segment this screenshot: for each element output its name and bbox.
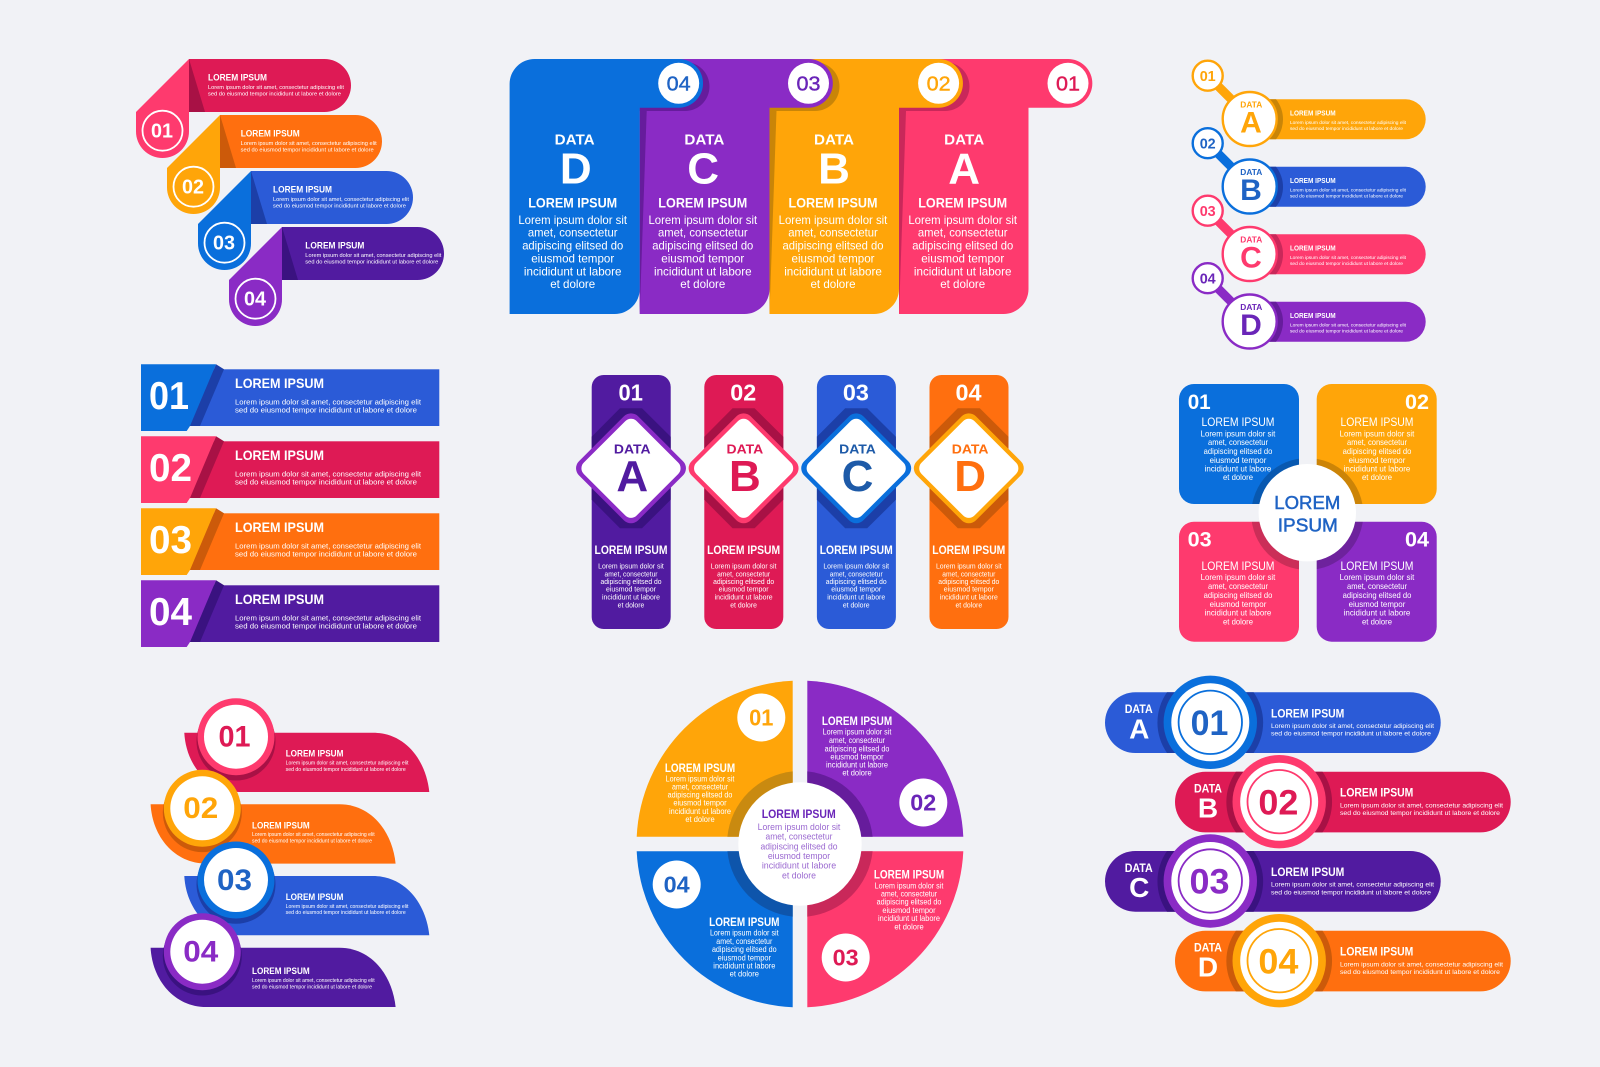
wave 03 (184, 842, 429, 935)
quadrant 03: incididunt ut labore (878, 914, 940, 923)
column 02 data B: et dolore (730, 600, 757, 609)
banner 03 (141, 508, 439, 575)
square 03: Lorem ipsum dolor sit (1201, 572, 1276, 582)
tab: data A: LOREM IPSUM (918, 194, 1007, 210)
wave 04: 04 (183, 936, 219, 968)
ribbon 03: sed do eiusmod tempor incididunt ut labore et dolore (273, 203, 406, 209)
row: 04 data D: 04 (1200, 272, 1216, 288)
column 02 data B: Lorem ipsum dolor sit (711, 562, 776, 571)
tab: data C: et dolore (680, 277, 726, 291)
tab: data B: LOREM IPSUM (788, 194, 878, 210)
wave 01: LOREM IPSUM (286, 749, 343, 760)
pill 01 data A: DATA (1125, 704, 1153, 716)
quadrant 03 (807, 851, 963, 1007)
quadrant 01: LOREM IPSUM (665, 763, 735, 775)
row: 02 data B: 02 (1200, 136, 1216, 152)
quadrant 04: Lorem ipsum dolor sit (710, 929, 779, 938)
pill 01 data A: Lorem ipsum dolor sit amet, consectetur adipiscing elit (1271, 723, 1434, 730)
tab: data D: adipiscing elitsed do (522, 239, 623, 253)
center circle: eiusmod tempor (768, 851, 830, 862)
row: 01 data A: LOREM IPSUM (1290, 108, 1336, 117)
row: 01 data A: A (1240, 106, 1262, 139)
column 03 data C: Lorem ipsum dolor sit (823, 562, 889, 571)
square 04 (1317, 522, 1437, 642)
quadrant 01: amet, consectetur (672, 783, 728, 792)
quadrant 02: incididunt ut labore (826, 760, 888, 769)
tab: data A: eiusmod tempor (921, 252, 1004, 266)
ribbon 04: Lorem ipsum dolor sit amet, consectetur adipiscing elit (305, 253, 442, 259)
quadrant 02: LOREM IPSUM (822, 716, 892, 728)
ribbon 01: Lorem ipsum dolor sit amet, consectetur adipiscing elit (208, 85, 345, 91)
tab: data B: 02 (927, 74, 951, 96)
ribbon 04: 04 (244, 289, 267, 311)
quadrant 03: 03 (833, 944, 859, 970)
column 02 data B (684, 375, 803, 629)
column 03 data C: 03 (843, 380, 869, 406)
tab: data C: C (687, 144, 719, 194)
square 01: eiusmod tempor (1210, 455, 1267, 465)
pill 03 data C: C (1129, 872, 1149, 903)
wave 01 (184, 698, 429, 792)
pill 04 data D (1175, 914, 1511, 1007)
banner 02: Lorem ipsum dolor sit amet, consectetur adipiscing elit (235, 469, 421, 478)
pill 04 data D: sed do eiusmod tempor incididunt ut labore et dolore (1340, 969, 1500, 976)
row: 03 data C (1193, 196, 1426, 281)
quadrant 01: Lorem ipsum dolor sit (666, 775, 735, 784)
tab: data D: 04 (667, 74, 691, 96)
tab: data D: DATA (555, 131, 595, 148)
quadrant 04: adipiscing elitsed do (712, 945, 777, 954)
pill 03 data C: Lorem ipsum dolor sit amet, consectetur adipiscing elit (1271, 882, 1434, 889)
square 03 (1179, 522, 1299, 642)
column 02 data B: amet, consectetur (717, 569, 771, 578)
square 02: LOREM IPSUM (1340, 415, 1414, 429)
banner 02: LOREM IPSUM (235, 447, 324, 463)
tab: data D: LOREM IPSUM (528, 194, 617, 210)
tab: data B: DATA (814, 131, 854, 148)
square 02: incididunt ut labore (1344, 464, 1411, 474)
tab: data A: adipiscing elitsed do (912, 239, 1013, 253)
row: 02 data B: sed do eiusmod tempor incididunt ut labore et dolore (1290, 193, 1403, 198)
row: 01 data A: sed do eiusmod tempor incididunt ut labore et dolore (1290, 126, 1403, 131)
column 03 data C (797, 375, 915, 629)
row: 02 data B: DATA (1240, 167, 1262, 177)
quadrant 03: Lorem ipsum dolor sit (875, 881, 944, 890)
tab: data B: eiusmod tempor (792, 252, 874, 266)
row: 04 data D: sed do eiusmod tempor incididunt ut labore et dolore (1290, 328, 1403, 333)
wave 04: LOREM IPSUM (252, 966, 310, 977)
ribbon 01: sed do eiusmod tempor incididunt ut labore et dolore (208, 91, 341, 97)
pill 03 data C: DATA (1125, 863, 1153, 875)
column 04 data D: adipiscing elitsed do (938, 577, 999, 586)
tab: data A: A (948, 144, 980, 194)
pill 04 data D: 04 (1258, 942, 1299, 981)
column 04 data D: DATA (952, 442, 989, 457)
square 01: Lorem ipsum dolor sit (1201, 428, 1276, 438)
column 02 data B: eiusmod tempor (719, 585, 769, 594)
column 04 data D: LOREM IPSUM (932, 544, 1005, 557)
pill 04 data D: Lorem ipsum dolor sit amet, consectetur adipiscing elit (1340, 961, 1503, 968)
tab: data B: et dolore (810, 277, 856, 291)
square 02: Lorem ipsum dolor sit (1340, 428, 1415, 438)
column 01 data A: eiusmod tempor (606, 585, 656, 594)
panel: circular quadrant chart (637, 681, 963, 1007)
ribbon 03 (198, 171, 413, 270)
column 04 data D (910, 375, 1028, 629)
ribbon 01: LOREM IPSUM (208, 72, 267, 83)
wave 01: Lorem ipsum dolor sit amet, consectetur adipiscing elit (286, 760, 409, 766)
pill 01 data A: 01 (1191, 704, 1228, 743)
row: 04 data D: Lorem ipsum dolor sit amet, consectetur adipiscing elit (1290, 322, 1407, 327)
square 04: LOREM IPSUM (1340, 559, 1414, 573)
ribbon 02: 02 (182, 177, 204, 199)
square 04: et dolore (1362, 616, 1392, 626)
square 02: eiusmod tempor (1349, 455, 1406, 465)
panel: folded ribbons 01-04 (136, 59, 444, 326)
square 04: eiusmod tempor (1349, 599, 1406, 609)
pill 02 data B: LOREM IPSUM (1340, 786, 1413, 800)
center circle: LOREM IPSUM (762, 809, 836, 821)
wave 04: Lorem ipsum dolor sit amet, consectetur adipiscing elit (252, 978, 375, 984)
row: 01 data A: 01 (1200, 69, 1216, 85)
banner 04: LOREM IPSUM (235, 591, 324, 607)
row: 03 data C: LOREM IPSUM (1290, 243, 1336, 252)
tab: data C: adipiscing elitsed do (652, 239, 754, 253)
quadrant 03: LOREM IPSUM (874, 869, 944, 881)
wave 03: sed do eiusmod tempor incididunt ut labore et dolore (286, 910, 406, 916)
tab: data B: adipiscing elitsed do (782, 239, 884, 253)
pill 04 data D: D (1198, 952, 1218, 983)
pill 02 data B: DATA (1194, 784, 1222, 796)
quadrant 03: et dolore (894, 922, 924, 931)
column 01 data A: 01 (619, 380, 643, 406)
tab: data A: amet, consectetur (918, 226, 1008, 240)
row: 03 data C: Lorem ipsum dolor sit amet, consectetur adipiscing elit (1290, 255, 1407, 260)
wave 02 (151, 770, 396, 864)
column 03 data C: LOREM IPSUM (820, 544, 893, 557)
wave 01: 01 (218, 720, 250, 754)
square 02: amet, consectetur (1347, 437, 1407, 447)
tab: data C: LOREM IPSUM (658, 194, 747, 210)
ribbon 02 (167, 115, 382, 214)
panel: interlocking tabs data A-D (510, 59, 1092, 314)
tab: data B: Lorem ipsum dolor sit (779, 213, 888, 227)
panel: pill bars with ringed numbers (1105, 676, 1511, 1007)
row: 01 data A: Lorem ipsum dolor sit amet, consectetur adipiscing elit (1290, 120, 1407, 125)
center circle: Lorem ipsum dolor sit (758, 822, 841, 833)
ribbon 03: LOREM IPSUM (273, 184, 332, 195)
row: 03 data C: sed do eiusmod tempor incididunt ut labore et dolore (1290, 261, 1403, 266)
banner 02: 02 (149, 447, 192, 490)
tab: data C: incididunt ut labore (654, 264, 752, 278)
square 01: 01 (1188, 391, 1211, 414)
wave 02: 02 (183, 792, 218, 825)
column 02 data B: 02 (730, 380, 756, 406)
pill 02 data B: B (1198, 793, 1218, 824)
row: 02 data B: Lorem ipsum dolor sit amet, consectetur adipiscing elit (1290, 187, 1407, 192)
wave 02: sed do eiusmod tempor incididunt ut labore et dolore (252, 838, 372, 844)
banner 03: sed do eiusmod tempor incididunt ut labore et dolore (235, 550, 417, 559)
pill 01 data A (1105, 676, 1441, 769)
square 01: et dolore (1223, 472, 1253, 482)
pill 02 data B (1175, 755, 1511, 848)
row: 02 data B: B (1240, 174, 1262, 207)
column 04 data D: Lorem ipsum dolor sit (936, 562, 1002, 571)
banner 03: LOREM IPSUM (235, 519, 324, 535)
quadrant 01: et dolore (685, 815, 715, 824)
square 04: amet, consectetur (1347, 581, 1407, 591)
banner 01: Lorem ipsum dolor sit amet, consectetur adipiscing elit (235, 397, 421, 406)
square 02 (1317, 384, 1437, 504)
square 04: adipiscing elitsed do (1343, 590, 1412, 600)
row: 04 data D: D (1240, 309, 1262, 342)
row: 03 data C: DATA (1240, 234, 1262, 244)
quadrant 02: 02 (910, 790, 936, 816)
square 03: incididunt ut labore (1205, 608, 1272, 618)
quadrant 02: eiusmod tempor (830, 752, 884, 761)
quadrant 04 (637, 851, 793, 1007)
column 01 data A: A (616, 452, 648, 501)
center circle (738, 782, 862, 906)
banner 01: LOREM IPSUM (235, 375, 324, 391)
center circle: amet, consectetur (766, 832, 832, 843)
column 01 data A: DATA (614, 442, 651, 457)
column 03 data C: incididunt ut labore (827, 592, 885, 601)
row: 03 data C: C (1240, 241, 1262, 274)
column 01 data A (572, 375, 690, 629)
quadrant 01: adipiscing elitsed do (668, 791, 733, 800)
quadrant 01: 01 (749, 704, 774, 730)
pill 04 data D: DATA (1194, 943, 1222, 955)
center circle (1251, 458, 1363, 570)
quadrant 01: eiusmod tempor (673, 799, 727, 808)
column 04 data D: 04 (956, 380, 982, 406)
tab: data B (770, 59, 963, 314)
ribbon 04 (229, 227, 444, 326)
tab: data D: amet, consectetur (528, 226, 618, 240)
square 04: Lorem ipsum dolor sit (1340, 572, 1415, 582)
column 01 data A: Lorem ipsum dolor sit (598, 562, 664, 571)
tab: data D: eiusmod tempor (531, 252, 614, 266)
square 03: eiusmod tempor (1210, 599, 1267, 609)
banner 03: Lorem ipsum dolor sit amet, consectetur adipiscing elit (235, 541, 421, 550)
banner 01: sed do eiusmod tempor incididunt ut labore et dolore (235, 406, 417, 415)
quadrant 02: amet, consectetur (829, 736, 885, 745)
quadrant 02 (807, 681, 963, 837)
column 03 data C: C (842, 452, 873, 501)
row: 03 data C: 03 (1200, 204, 1216, 220)
column 04 data D: amet, consectetur (942, 569, 996, 578)
quadrant 04: eiusmod tempor (718, 953, 771, 962)
center circle: LOREM (1274, 492, 1340, 513)
row: 04 data D: LOREM IPSUM (1290, 311, 1336, 320)
tab: data C: eiusmod tempor (661, 252, 744, 266)
column 02 data B: B (729, 452, 761, 501)
quadrant 04: amet, consectetur (716, 937, 773, 946)
wave 04 (151, 913, 396, 1007)
tab: data A: DATA (944, 131, 984, 148)
row: 02 data B (1193, 128, 1426, 214)
row: 04 data D (1193, 263, 1426, 348)
square 01 (1179, 384, 1299, 504)
tab: data A: 01 (1056, 74, 1080, 96)
center circle: incididunt ut labore (762, 861, 836, 872)
square 03: LOREM IPSUM (1202, 559, 1274, 573)
ribbon 03: 03 (213, 233, 235, 255)
tab: data C (640, 59, 833, 314)
column 04 data D: et dolore (955, 600, 982, 609)
ribbon 02: LOREM IPSUM (241, 128, 300, 139)
banner 02 (141, 436, 439, 503)
pill 04 data D: LOREM IPSUM (1340, 945, 1413, 959)
row: 04 data D: DATA (1240, 302, 1262, 312)
panel: linked circles data A-D (1193, 61, 1426, 348)
tab: data A: Lorem ipsum dolor sit (908, 213, 1018, 227)
ribbon 03: Lorem ipsum dolor sit amet, consectetur adipiscing elit (273, 197, 410, 203)
tab: data D (510, 59, 703, 314)
ribbon 04: sed do eiusmod tempor incididunt ut labore et dolore (305, 259, 438, 265)
tab: data C: 03 (796, 74, 820, 96)
column 03 data C: et dolore (843, 600, 870, 609)
wave 03: 03 (217, 864, 252, 897)
square 02: 02 (1405, 391, 1429, 414)
column 01 data A: amet, consectetur (604, 569, 658, 578)
ribbon 01 (136, 59, 351, 158)
square 02: et dolore (1362, 472, 1392, 482)
center circle: et dolore (782, 871, 816, 882)
pill 03 data C: sed do eiusmod tempor incididunt ut labore et dolore (1271, 889, 1431, 896)
panel: numbered banner list (141, 364, 439, 647)
pill 02 data B: Lorem ipsum dolor sit amet, consectetur adipiscing elit (1340, 802, 1503, 809)
center circle: IPSUM (1278, 515, 1338, 536)
banner 01 (141, 364, 439, 431)
square 02: adipiscing elitsed do (1343, 446, 1412, 456)
quadrant 04: et dolore (730, 970, 759, 979)
quadrant 01 (637, 681, 793, 837)
square 01: LOREM IPSUM (1202, 415, 1274, 429)
column 01 data A: et dolore (618, 600, 644, 609)
banner 02: sed do eiusmod tempor incididunt ut labore et dolore (235, 478, 417, 487)
quadrant 04: incididunt ut labore (713, 961, 775, 970)
row: 01 data A (1193, 61, 1426, 146)
pill 01 data A: sed do eiusmod tempor incididunt ut labore et dolore (1271, 731, 1431, 738)
quadrant 02: et dolore (842, 769, 872, 778)
banner 04 (141, 580, 439, 647)
pill 01 data A: A (1129, 713, 1149, 744)
column 02 data B: adipiscing elitsed do (713, 577, 774, 586)
column 01 data A: incididunt ut labore (602, 592, 660, 601)
quadrant 04: LOREM IPSUM (709, 917, 779, 929)
quadrant 03: adipiscing elitsed do (877, 898, 942, 907)
square 01: amet, consectetur (1208, 437, 1268, 447)
tab: data B: B (818, 144, 850, 194)
column 03 data C: DATA (839, 442, 876, 457)
banner 04: 04 (149, 591, 193, 634)
square 04: incididunt ut labore (1344, 608, 1411, 618)
banner 01: 01 (149, 375, 189, 418)
quadrant 02: Lorem ipsum dolor sit (823, 728, 892, 737)
tab: data D: Lorem ipsum dolor sit (518, 213, 628, 227)
ribbon 02: Lorem ipsum dolor sit amet, consectetur adipiscing elit (241, 141, 377, 147)
tab: data A (899, 59, 1092, 314)
tab: data A: et dolore (940, 277, 986, 291)
square 01: adipiscing elitsed do (1204, 446, 1273, 456)
pill 01 data A: LOREM IPSUM (1271, 706, 1344, 720)
tab: data C: Lorem ipsum dolor sit (648, 213, 758, 227)
tab: data C: amet, consectetur (658, 226, 748, 240)
pill 02 data B: 02 (1258, 783, 1298, 822)
square 03: amet, consectetur (1208, 581, 1268, 591)
quadrant 01: incididunt ut labore (669, 807, 731, 816)
wave 02: LOREM IPSUM (252, 820, 310, 831)
column 03 data C: adipiscing elitsed do (826, 577, 887, 586)
quadrant 03: eiusmod tempor (882, 906, 936, 915)
pill 03 data C (1105, 834, 1441, 928)
column 02 data B: incididunt ut labore (715, 592, 773, 601)
tab: data D: incididunt ut labore (524, 264, 622, 278)
square 03: 03 (1188, 528, 1212, 552)
row: 01 data A: DATA (1240, 99, 1262, 109)
square 03: adipiscing elitsed do (1204, 590, 1273, 600)
tab: data D: D (560, 144, 592, 194)
wave 03: LOREM IPSUM (286, 892, 343, 903)
ribbon 01: 01 (151, 121, 173, 143)
square 01: incididunt ut labore (1205, 464, 1272, 474)
column 02 data B: LOREM IPSUM (707, 544, 780, 557)
column 04 data D: incididunt ut labore (940, 592, 998, 601)
center circle: adipiscing elitsed do (760, 841, 838, 852)
wave 02: Lorem ipsum dolor sit amet, consectetur adipiscing elit (252, 832, 375, 838)
pill 03 data C: LOREM IPSUM (1271, 865, 1344, 879)
square 04: 04 (1405, 528, 1429, 552)
column 02 data B: DATA (727, 442, 764, 457)
row: 02 data B: LOREM IPSUM (1290, 176, 1336, 185)
quadrant 03: amet, consectetur (881, 890, 937, 899)
panel: wave banners with circles (151, 698, 429, 1007)
panel: diamond columns (572, 375, 1028, 629)
banner 04: sed do eiusmod tempor incididunt ut labore et dolore (235, 622, 417, 631)
column 03 data C: eiusmod tempor (831, 585, 882, 594)
column 04 data D: D (954, 452, 986, 501)
column 01 data A: LOREM IPSUM (594, 544, 668, 557)
wave 01: sed do eiusmod tempor incididunt ut labore et dolore (286, 767, 406, 773)
tab: data A: incididunt ut labore (914, 264, 1012, 278)
tab: data B: amet, consectetur (788, 226, 878, 240)
wave 04: sed do eiusmod tempor incididunt ut labore et dolore (252, 984, 372, 990)
tab: data B: incididunt ut labore (784, 264, 882, 278)
column 01 data A: adipiscing elitsed do (600, 577, 662, 586)
ribbon 04: LOREM IPSUM (305, 240, 364, 251)
quadrant 04: 04 (664, 872, 690, 898)
ribbon 02: sed do eiusmod tempor incididunt ut labore et dolore (241, 147, 374, 153)
quadrant 02: adipiscing elitsed do (825, 744, 890, 753)
column 04 data D: eiusmod tempor (944, 585, 994, 594)
banner 03: 03 (149, 519, 192, 562)
column 03 data C: amet, consectetur (830, 569, 883, 578)
tab: data C: DATA (684, 131, 725, 148)
tab: data D: et dolore (550, 277, 596, 291)
pill 02 data B: sed do eiusmod tempor incididunt ut labore et dolore (1340, 810, 1500, 817)
wave 03: Lorem ipsum dolor sit amet, consectetur adipiscing elit (286, 904, 409, 910)
banner 04: Lorem ipsum dolor sit amet, consectetur adipiscing elit (235, 613, 421, 622)
panel: four squares around a circle (1179, 384, 1437, 642)
square 03: et dolore (1223, 616, 1253, 626)
pill 03 data C: 03 (1190, 863, 1230, 902)
